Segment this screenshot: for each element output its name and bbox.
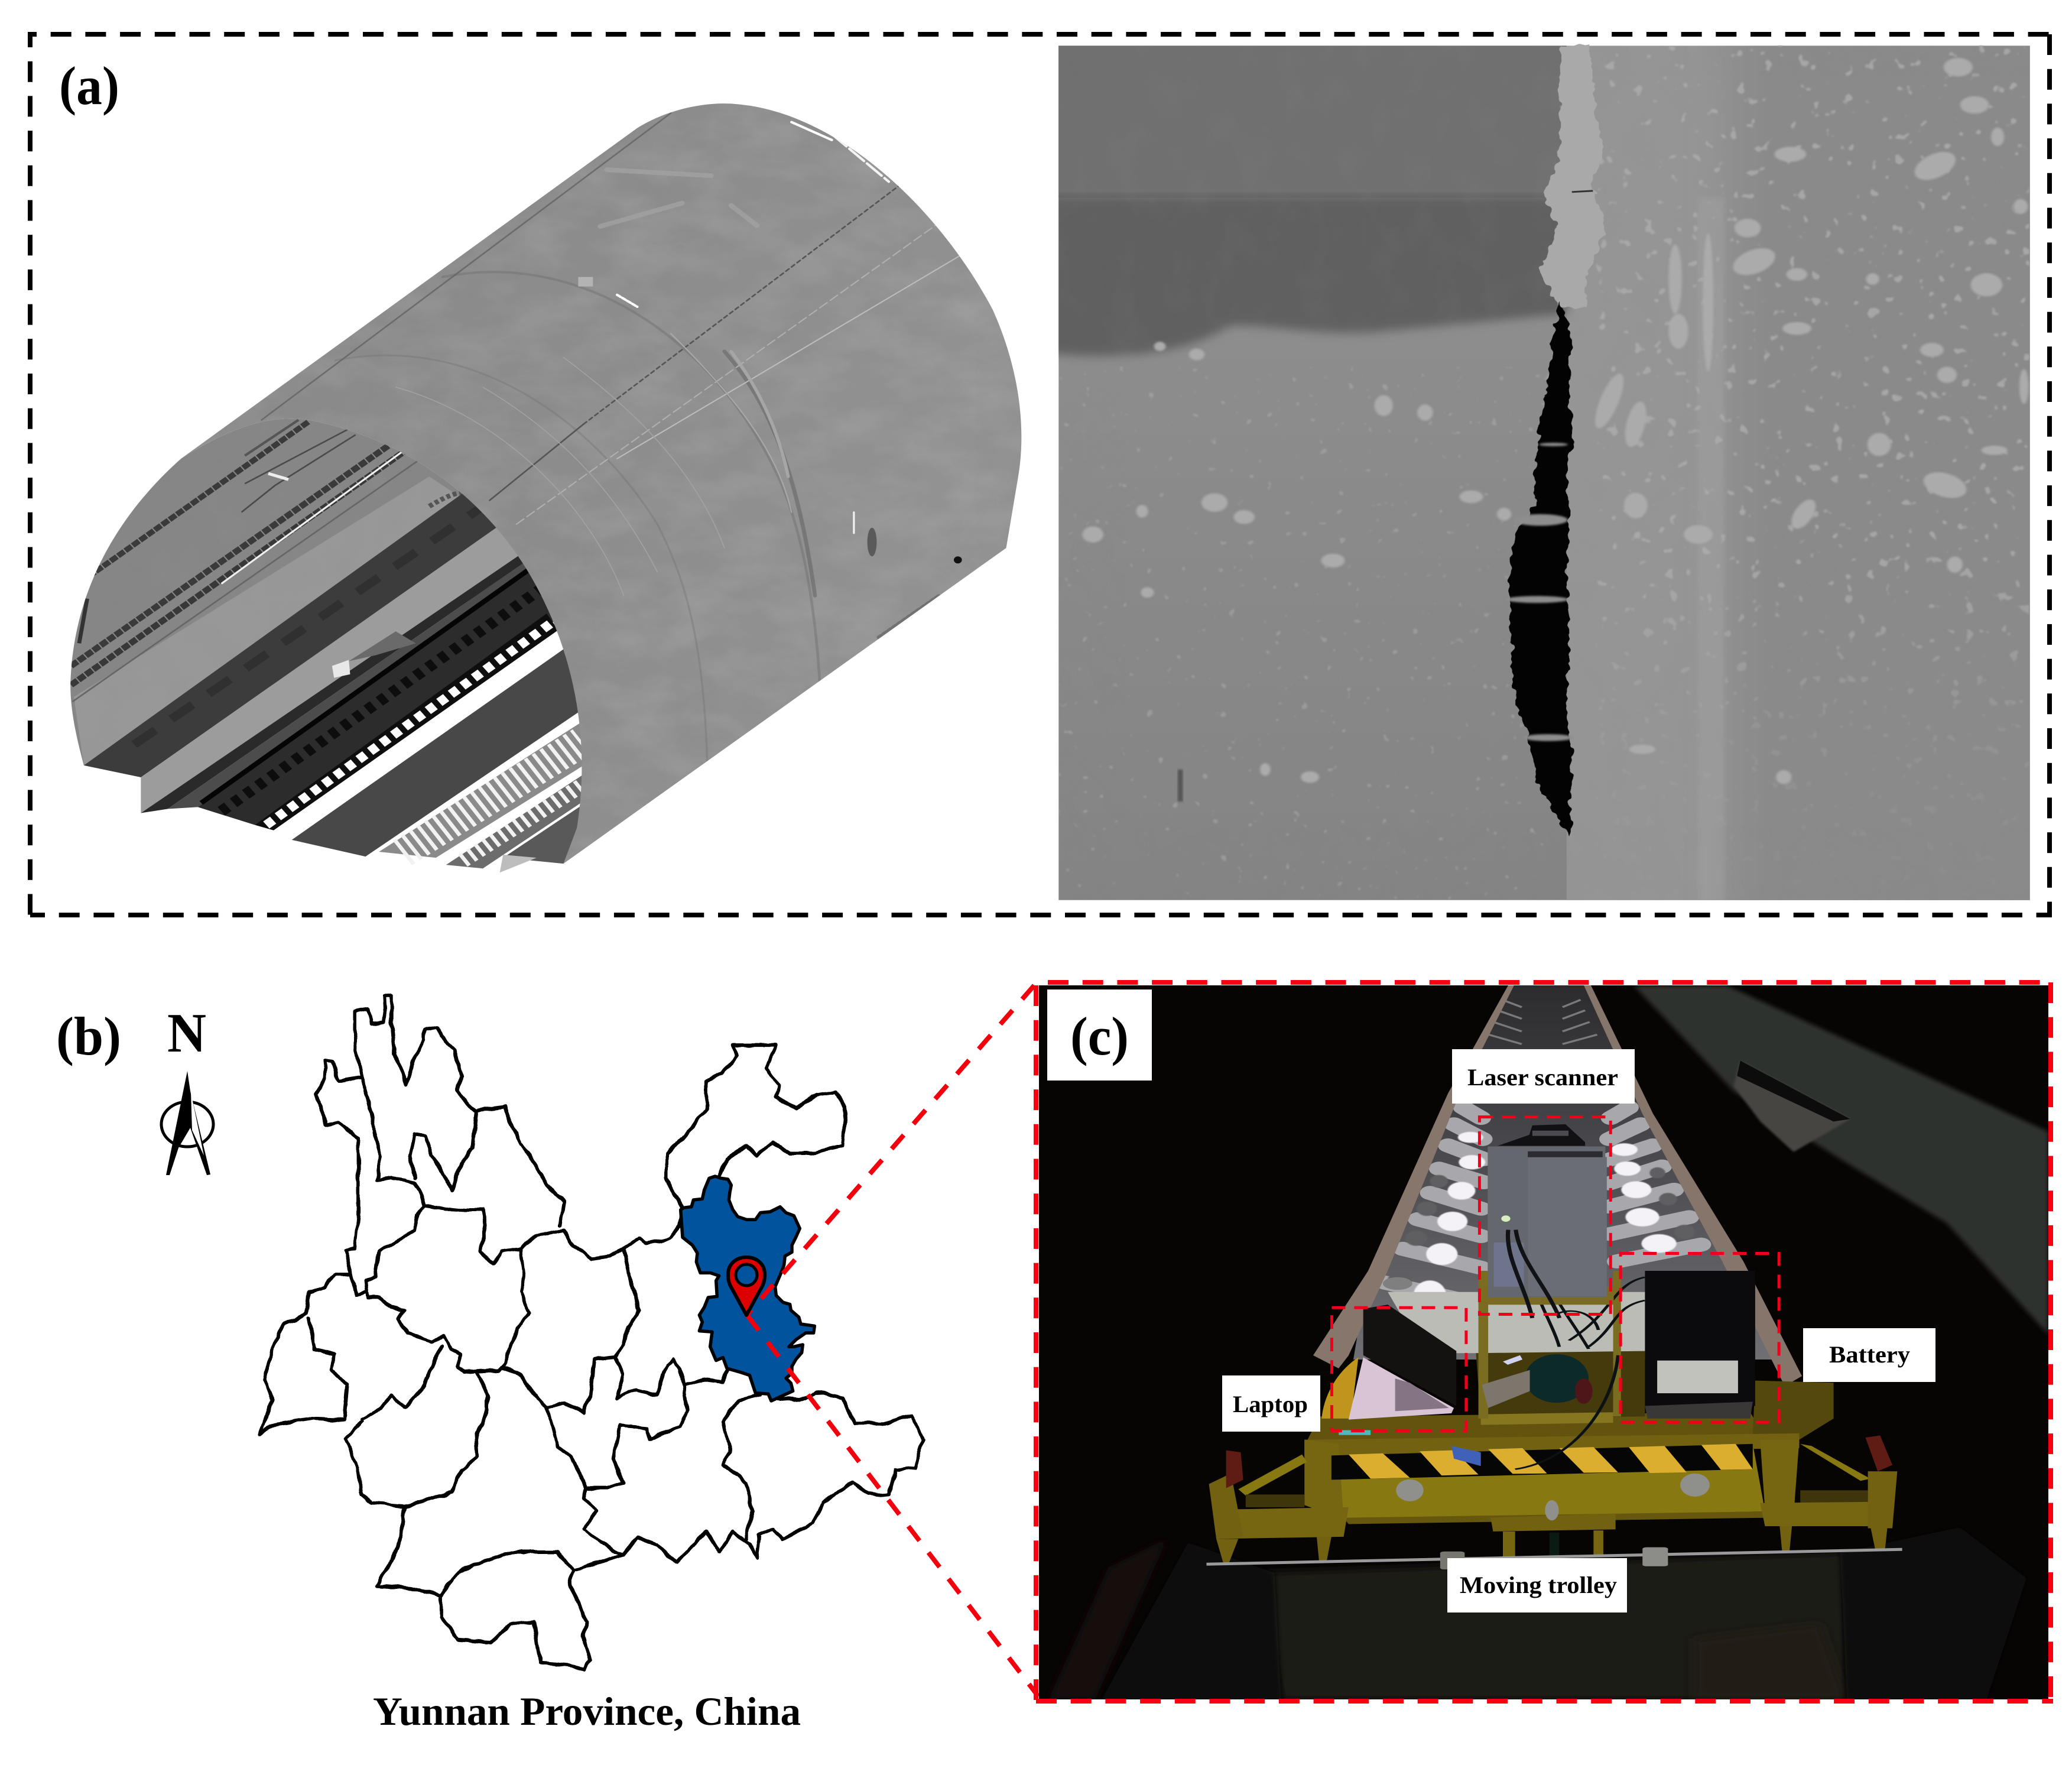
location pin [728,1257,765,1315]
red dashed callout: battery [1620,1253,1779,1422]
crack photo background [1058,46,2030,900]
frame uprights [1479,1271,1621,1419]
crack photograph [1058,44,2030,900]
label: battery [1803,1328,1935,1382]
tunnel side wall and ground [1048,985,2048,1700]
battery [1645,1271,1755,1419]
tunnel outer shell [181,103,1021,864]
red dashed callouts [1331,1117,1779,1431]
3D tunnel point cloud [67,89,1040,875]
label: moving trolley [1447,1558,1627,1612]
panel c: trolley photograph [1039,985,2048,1700]
rails [1313,985,1802,1386]
map of Yunnan province [261,995,923,1670]
panel c: red dashed frame [1036,982,2053,1702]
crack photo speckles [1058,45,2029,900]
map caption: Yunnan Province, China [373,1689,801,1734]
tunnel interior wall [67,405,537,774]
hazard stripe [1331,1444,1753,1480]
crack void [1178,191,1593,836]
north arrow [161,1002,213,1175]
concrete seam above crack [1540,46,1606,308]
laptop [1321,1305,1456,1435]
label: battery: Battery [1829,1341,1910,1368]
label: laser scanner: Laser scanner [1467,1064,1618,1091]
red zoom connector lines [748,985,1038,1696]
label: moving trolley: Moving trolley [1460,1572,1617,1598]
panel label c [1047,989,1152,1081]
cable bundle [1482,1271,1645,1469]
trolley bolts [1396,1474,1710,1520]
label: laser scanner [1452,1049,1635,1104]
north arrow: N [167,1002,206,1064]
crack surface blotches [1082,58,2028,784]
label: laptop: Laptop [1233,1391,1308,1417]
sleeper light patch and laptop, battery, trolley [1206,1271,1902,1569]
axle rod [1206,1547,1902,1569]
highlighted blue prefecture [681,1176,814,1401]
label: laptop [1222,1375,1320,1432]
red dashed callout: laser scanner [1479,1117,1610,1314]
panel label b: (b) [56,1006,121,1066]
tunnel floor strips [84,488,583,872]
trolley body [1209,1351,1897,1564]
track bed between rails [1353,985,1773,1360]
panel label c: (c) [1070,1006,1129,1066]
sleepers and chevrons [1385,1000,1701,1310]
red dashed callout: laptop [1331,1307,1466,1431]
laser scanner device [1484,1124,1614,1318]
panel label a: (a) [59,56,119,116]
panel a: dashed black frame [28,34,2052,917]
